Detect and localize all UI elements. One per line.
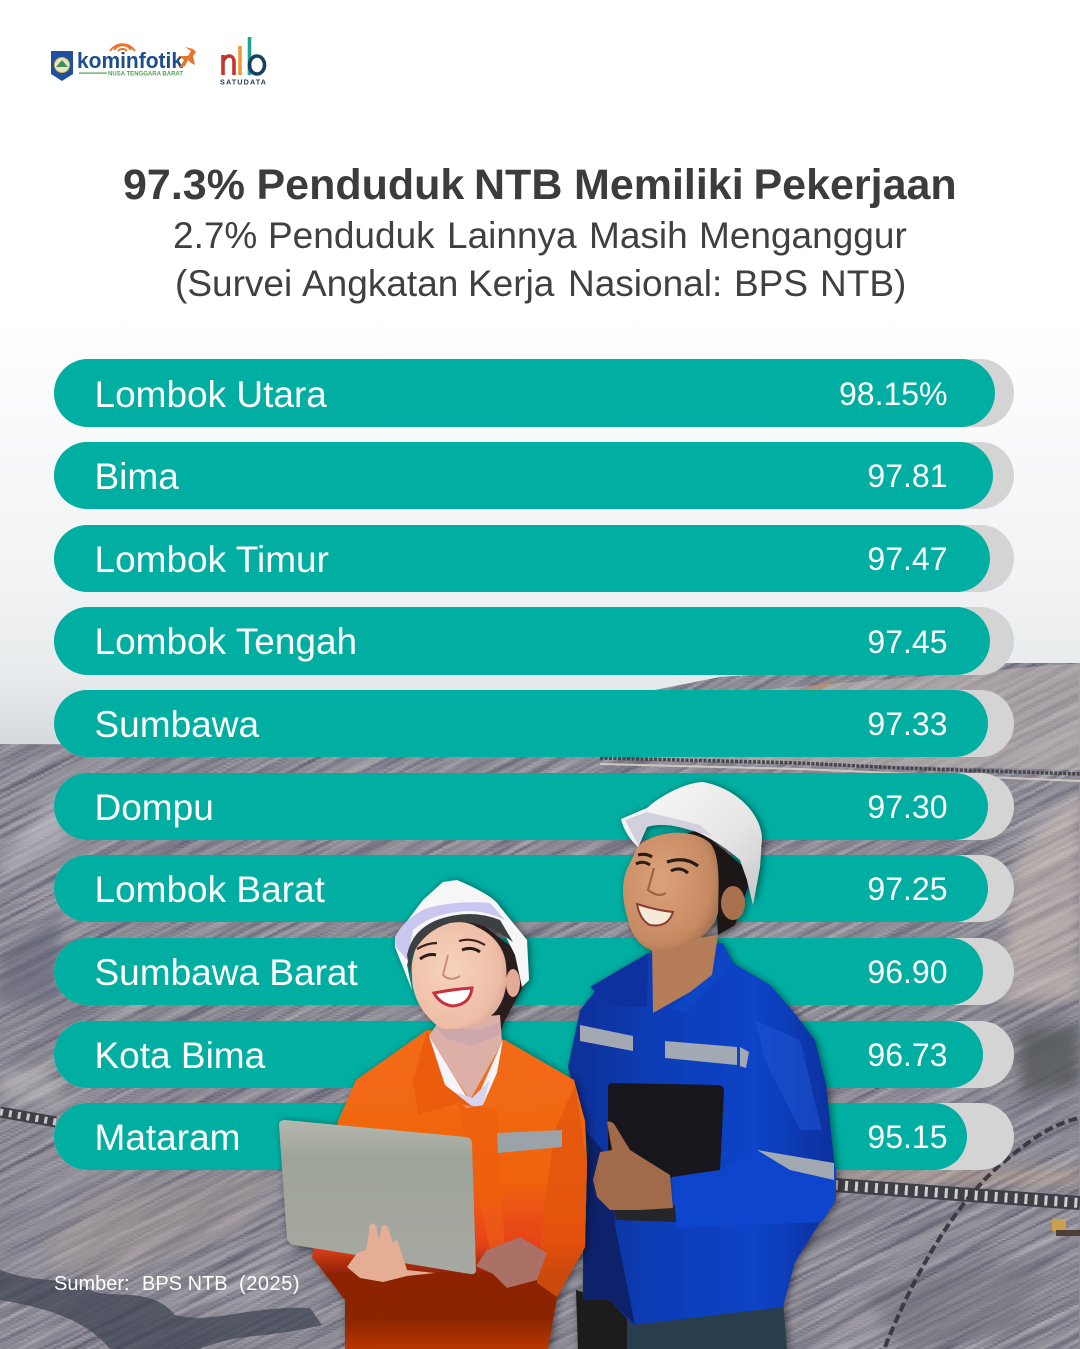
ntb letters <box>223 37 264 75</box>
title: Penduduk <box>256 161 464 209</box>
subtitle line 2: Angkatan <box>302 263 458 304</box>
bar: Lombok Timur <box>54 525 1014 592</box>
bulldozer <box>1052 1219 1080 1236</box>
blue jacket <box>568 943 836 1325</box>
face <box>412 922 507 1029</box>
bar: Lombok Tengah <box>54 607 1014 675</box>
brows <box>417 940 485 949</box>
helmet brim lavender <box>395 902 505 960</box>
icon: deer <box>179 47 196 68</box>
eyes <box>420 948 480 959</box>
kominfotik wordmark: kominfotik <box>77 48 184 73</box>
subtitle line 2: (Survei <box>175 263 292 304</box>
ear <box>506 969 520 997</box>
laptop <box>279 1120 476 1274</box>
reflective strip <box>497 1130 562 1153</box>
conveyor rail left <box>0 1112 56 1122</box>
jacket light panel <box>755 1020 822 1130</box>
left hand <box>347 1223 435 1282</box>
bar: Sumbawa Barat: 96.90 <box>867 954 948 990</box>
collar left <box>590 953 648 1007</box>
hand <box>593 1122 673 1210</box>
eyes <box>636 862 688 873</box>
bar: Lombok Utara <box>54 359 1014 427</box>
helmet <box>395 880 529 990</box>
brows <box>638 854 698 866</box>
bar: Lombok Utara: 98.15% <box>839 376 948 412</box>
orange collar right <box>483 1040 537 1110</box>
bar: Lombok Tengah: 97.45 <box>867 624 948 660</box>
hair <box>640 830 748 935</box>
neck <box>652 935 718 1013</box>
title: Pekerjaan <box>754 161 957 209</box>
ear <box>721 886 745 920</box>
orange collar left <box>413 1030 473 1115</box>
neck <box>428 1015 502 1100</box>
white shirt collar <box>427 1033 503 1108</box>
conveyor rail upper <box>600 758 1080 781</box>
bar: Sumbawa Barat <box>54 938 1014 1005</box>
bar: Sumbawa <box>54 690 1014 757</box>
dark haul track <box>885 1118 1079 1347</box>
icon: NTB shield <box>51 51 73 81</box>
bar: Mataram: Mataram <box>94 1117 240 1158</box>
face <box>623 833 719 952</box>
source note: BPS NTB <box>142 1273 228 1295</box>
subtitle line 1: Lainnya <box>447 215 577 256</box>
illustration: male worker <box>568 782 836 1349</box>
bar: Kota Bima <box>54 1021 1014 1088</box>
bar: Bima: Bima <box>94 456 179 497</box>
bar chart: employment rate by regency <box>54 359 1014 1170</box>
bar: Sumbawa: Sumbawa <box>94 704 259 745</box>
subtitle line 2: Kerja <box>468 263 555 304</box>
bar: Kota Bima: 96.73 <box>867 1037 948 1073</box>
subtitle line 2: NTB) <box>820 263 906 304</box>
subtitle line 2: BPS <box>734 263 808 304</box>
satudata wordmark: SATUDATA <box>220 78 266 86</box>
neck shade <box>436 1022 500 1046</box>
collar right <box>670 943 733 1013</box>
shirt inner lavender <box>450 1080 490 1108</box>
jeans <box>627 1300 787 1349</box>
bar: Lombok Barat <box>54 855 1014 922</box>
logo: ntb satudata <box>220 37 266 86</box>
title: Memiliki <box>574 161 744 209</box>
orange jacket <box>312 1030 587 1349</box>
bar: Kota Bima: Kota Bima <box>94 1035 266 1076</box>
tablet <box>608 1083 724 1222</box>
bar: Lombok Utara: Lombok Utara <box>94 374 327 415</box>
source note: Sumber: <box>54 1273 130 1295</box>
helmet <box>621 782 762 905</box>
nose <box>443 955 460 979</box>
bar: Lombok Timur: 97.47 <box>867 541 948 577</box>
helmet band <box>407 914 513 975</box>
title: 97.3% <box>123 161 245 209</box>
source note: (2025) <box>239 1273 300 1295</box>
hair <box>410 915 524 1040</box>
bar: Dompu: 97.30 <box>867 789 948 825</box>
subtitle line 1: 2.7% <box>173 215 257 256</box>
shadow on jacket left <box>583 1130 635 1325</box>
bar: Sumbawa: 97.33 <box>867 706 948 742</box>
subtitle line 1: Menganggur <box>699 215 907 256</box>
subtitle line 2: Nasional: <box>568 263 722 304</box>
right hand <box>476 1237 547 1288</box>
tagline: NUSA TENGGARA BARAT <box>108 70 183 78</box>
sleeve <box>537 1085 587 1297</box>
bar: Lombok Barat: 97.25 <box>867 871 948 907</box>
bar: Sumbawa Barat: Sumbawa Barat <box>94 952 358 993</box>
conveyor rail right <box>835 1185 1080 1203</box>
bar: Bima <box>54 442 1014 509</box>
smile <box>637 904 673 925</box>
logo: kominfotik <box>51 44 196 81</box>
nose <box>648 868 666 895</box>
helmet lining <box>625 812 712 845</box>
bar: Dompu <box>54 773 1014 840</box>
bar: Lombok Barat: Lombok Barat <box>94 869 326 910</box>
bar: Lombok Tengah: Lombok Tengah <box>94 621 357 662</box>
illustration: female worker <box>279 880 587 1349</box>
bar: Mataram <box>54 1103 1014 1170</box>
sleeve over tablet <box>672 1150 836 1228</box>
reflective strips <box>580 1025 749 1068</box>
subtitle line 1: Masih <box>589 215 688 256</box>
bar: Bima: 97.81 <box>867 458 948 494</box>
bar: Lombok Timur: Lombok Timur <box>94 539 329 580</box>
subtitle line 1: Penduduk <box>268 215 435 256</box>
title: NTB <box>474 161 562 209</box>
smile <box>434 988 472 1006</box>
green rule <box>79 72 107 74</box>
bar: Dompu: Dompu <box>94 787 214 828</box>
icon: signal arcs <box>110 44 135 51</box>
placket <box>458 1103 505 1255</box>
strip on sleeve <box>757 1150 834 1180</box>
bar: Mataram: 95.15 <box>867 1119 948 1155</box>
dark trousers behind <box>576 1290 640 1349</box>
